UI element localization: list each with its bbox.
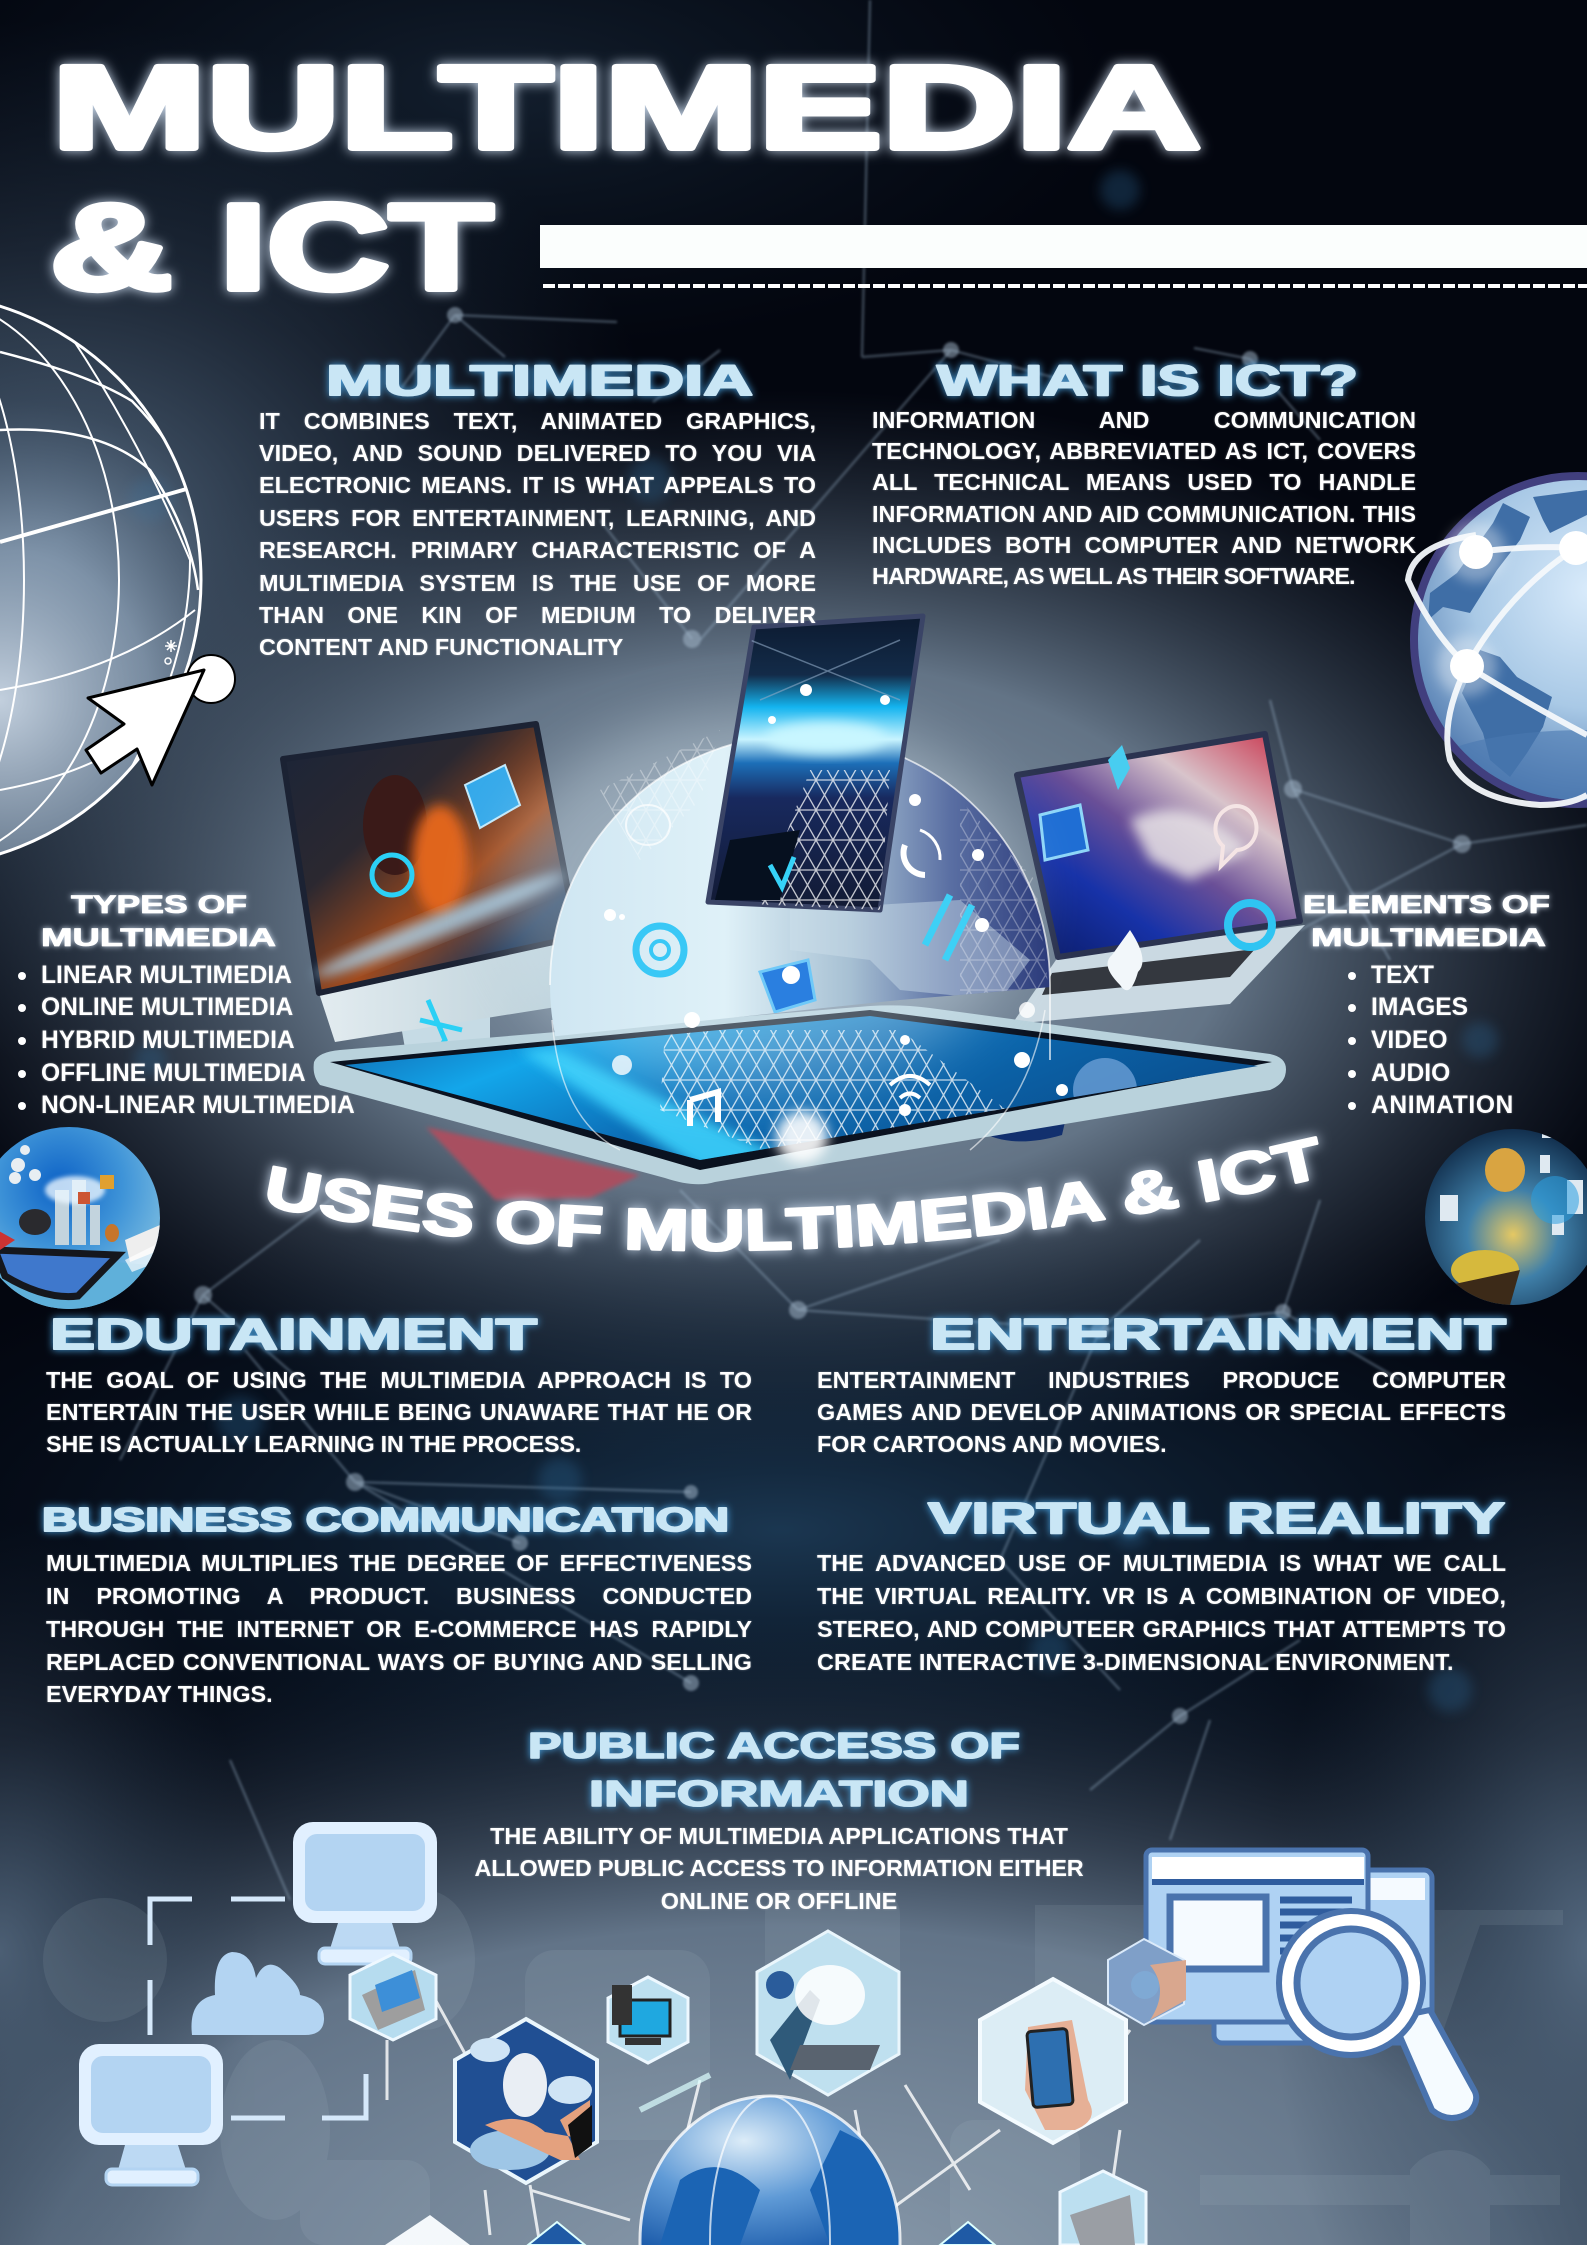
text: virtual reality: [816, 1550, 1506, 1674]
text: ict definition: [871, 407, 1416, 589]
text: multimedia definition: USERS FOR ENTERTAINMENT, LEARNING, AND: [259, 505, 816, 531]
title: & ICT: [50, 179, 493, 315]
text: entertainment: GAMES AND DEVELOP ANIMATIONS OR SPECIAL EFFECTS: [817, 1399, 1506, 1425]
list: types of multimedia: LINEAR MULTIMEDIA: [41, 962, 292, 988]
hexagon: media: [757, 1931, 899, 2095]
hexagon: cloud hand: [455, 2019, 597, 2183]
text: business communication: EVERYDAY THINGS.: [46, 1681, 273, 1707]
list: elements of multimedia: [1348, 962, 1514, 1119]
heading: public access of information: PUBLIC ACCESS OF: [528, 1725, 1020, 1766]
hexagon fragments along bottom edge: [385, 2215, 995, 2245]
text: ict definition: HARDWARE, AS WELL AS THEIR SOFTWARE.: [872, 563, 1355, 589]
heading: virtual reality: VIRTUAL REALITY: [928, 1494, 1505, 1543]
heading: elements of multimedia: [1303, 891, 1550, 952]
list: types of multimedia: [18, 962, 355, 1119]
heading: types of multimedia: [41, 891, 276, 952]
heading: public access of information: INFORMATION: [589, 1773, 969, 1814]
text: ict definition: ALL TECHNICAL MEANS USED TO HANDLE: [872, 469, 1416, 495]
list: elements of multimedia: TEXT: [1371, 962, 1434, 988]
illustration: wireframe globe: [0, 290, 205, 870]
list: elements of multimedia: AUDIO: [1371, 1060, 1450, 1087]
heading: types of multimedia: TYPES OF: [71, 891, 247, 919]
text: multimedia definition: THAN ONE KIN OF MEDIUM TO DELIVER: [259, 602, 816, 628]
hexagon: phone in hand: [980, 1979, 1126, 2143]
image: right media circle: [1425, 1128, 1587, 1305]
illustration: right laptop: [1012, 734, 1305, 1024]
illustration: large tablet: [314, 1005, 1286, 1184]
title bar: [540, 225, 1587, 268]
list: types of multimedia: HYBRID MULTIMEDIA: [41, 1027, 295, 1054]
title: MULTIMEDIA: [52, 42, 1201, 174]
hexagon: eye: [1108, 1939, 1186, 2025]
text: edutainment: THE GOAL OF USING THE MULTIMEDIA APPROACH IS TO: [46, 1366, 752, 1392]
text: multimedia definition: ELECTRONIC MEANS. IT IS WHAT APPEALS TO: [259, 472, 816, 498]
text: ict definition: INFORMATION AND COMMUNICATION: [872, 407, 1416, 433]
text: multimedia definition: VIDEO, AND SOUND DELIVERED TO YOU VIA: [259, 440, 816, 466]
text: public access: ALLOWED PUBLIC ACCESS TO INFORMATION EITHER: [474, 1855, 1084, 1881]
text: business communication: MULTIMEDIA MULTIPLIES THE DEGREE OF EFFECTIVENESS: [46, 1550, 752, 1576]
dashed rule: [543, 284, 1587, 288]
list: types of multimedia: ONLINE MULTIMEDIA: [41, 994, 293, 1021]
heading: multimedia: MULTIMEDIA: [326, 357, 753, 405]
text: virtual reality: THE ADVANCED USE OF MULTIMEDIA IS WHAT WE CALL: [817, 1550, 1506, 1576]
heading: business communication: BUSINESS COMMUNICATION: [42, 1501, 729, 1538]
text: virtual reality: THE VIRTUAL REALITY. VR IS A COMBINATION OF VIDEO,: [817, 1583, 1506, 1609]
heading: public access of information: [528, 1725, 1020, 1814]
text: virtual reality: STEREO, AND COMPUTEER GRAPHICS THAT ATTEMPTS TO: [817, 1616, 1506, 1642]
text: public access: [474, 1823, 1084, 1914]
heading: elements of multimedia: ELEMENTS OF: [1303, 891, 1550, 919]
text: virtual reality: CREATE INTERACTIVE 3-DIMENSIONAL ENVIRONMENT.: [817, 1648, 1454, 1674]
list: elements of multimedia: VIDEO: [1371, 1027, 1448, 1054]
illustration: small tablet: [708, 616, 923, 910]
heading: entertainment: ENTERTAINMENT: [930, 1310, 1506, 1359]
illustration: network hexagons and globe: [387, 1990, 1130, 2245]
list: elements of multimedia: IMAGES: [1371, 994, 1468, 1021]
text: public access: THE ABILITY OF MULTIMEDIA APPLICATIONS THAT: [490, 1823, 1068, 1849]
text: multimedia definition: [258, 408, 816, 660]
text: entertainment: [816, 1366, 1506, 1457]
text: business communication: [45, 1550, 752, 1707]
hexagon: laptop bottom: [1060, 2171, 1146, 2245]
text: business communication: REPLACED CONVENTIONAL WAYS OF BUYING AND SELLING: [46, 1648, 752, 1674]
text: public access: ONLINE OR OFFLINE: [661, 1888, 897, 1914]
hexagon: monitor: [608, 1977, 688, 2063]
text: multimedia definition: CONTENT AND FUNCTIONALITY: [259, 634, 623, 660]
hexagon: laptop: [350, 1954, 436, 2040]
text: entertainment: ENTERTAINMENT INDUSTRIES PRODUCE COMPUTER: [817, 1366, 1506, 1392]
text: ict definition: INFORMATION AND AID COMMUNICATION. THIS: [872, 501, 1416, 527]
illustration: hand holding tablet: [426, 1100, 1070, 1200]
faint background app icons: [43, 1890, 1563, 2245]
heading: types of multimedia: MULTIMEDIA: [41, 924, 276, 952]
text: multimedia definition: MULTIMEDIA SYSTEM IS THE USE OF MORE: [259, 570, 816, 596]
illustration: central globe: [500, 710, 1068, 1235]
text: edutainment: [45, 1366, 752, 1457]
text: business communication: THROUGH THE INTERNET OR E-COMMERCE HAS RAPIDLY: [46, 1616, 752, 1642]
icon: computer network: [79, 1822, 437, 2185]
illustration: right network globe: [1408, 472, 1587, 810]
text: business communication: IN PROMOTING A PRODUCT. BUSINESS CONDUCTED: [46, 1583, 752, 1609]
icon: mouse cursor: [86, 640, 235, 785]
text: ict definition: INCLUDES BOTH COMPUTER AND NETWORK: [872, 532, 1416, 558]
text: multimedia definition: IT COMBINES TEXT, ANIMATED GRAPHICS,: [259, 408, 816, 434]
icon: browser and magnifier: [1146, 1850, 1476, 2118]
text: ict definition: TECHNOLOGY, ABBREVIATED AS ICT, COVERS: [872, 438, 1416, 464]
curved heading: uses of multimedia and ict: USES OF MULTIMEDIA & ICT: [258, 1128, 1326, 1261]
heading: edutainment: EDUTAINMENT: [50, 1310, 537, 1359]
list: elements of multimedia: ANIMATION: [1371, 1092, 1514, 1119]
title: [50, 42, 1201, 315]
text: edutainment: SHE IS ACTUALLY LEARNING IN THE PROCESS.: [46, 1431, 581, 1457]
image: left media circle: [0, 1127, 160, 1310]
illustration: desktop monitor: [283, 724, 600, 1105]
text: entertainment: FOR CARTOONS AND MOVIES.: [817, 1431, 1167, 1457]
text: edutainment: ENTERTAIN THE USER WHILE BEING UNAWARE THAT HE OR: [46, 1399, 752, 1425]
list: types of multimedia: OFFLINE MULTIMEDIA: [41, 1060, 306, 1087]
heading: elements of multimedia: MULTIMEDIA: [1311, 924, 1546, 952]
heading: what is ict: WHAT IS ICT?: [937, 357, 1358, 405]
list: types of multimedia: NON-LINEAR MULTIMEDIA: [41, 1092, 355, 1119]
text: multimedia definition: RESEARCH. PRIMARY CHARACTERISTIC OF A: [259, 537, 816, 563]
